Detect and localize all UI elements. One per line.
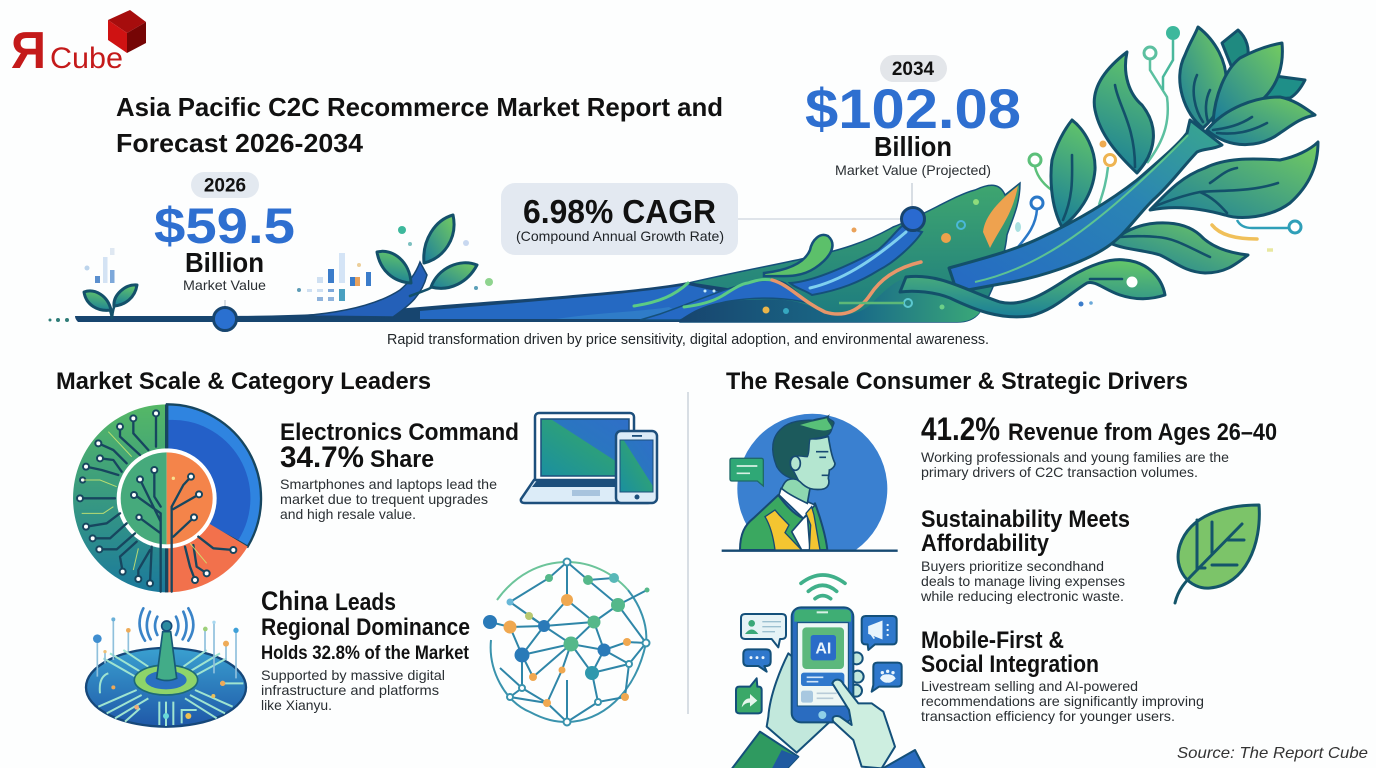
description (921, 449, 1229, 480)
right cuff (882, 750, 925, 768)
source note: Source: The Report Cube (1177, 745, 1368, 762)
tie (806, 507, 820, 550)
bubble lines (737, 466, 757, 473)
timeline base (75, 282, 740, 322)
unit: Billion (874, 131, 952, 162)
description (261, 667, 445, 713)
posts (97, 620, 236, 678)
leaf: upper right flower (1213, 43, 1282, 122)
description: Smartphones and laptops lead the (280, 476, 497, 492)
text: sustainability: Sustainability Meets (921, 506, 1130, 533)
vine node (1126, 276, 1138, 288)
dark lower body (680, 280, 980, 322)
leaf: lower right (1110, 223, 1248, 273)
text: revenue (921, 411, 1277, 480)
text: sustainability (920, 506, 1130, 604)
unit: Billion (185, 247, 264, 278)
floating dots (398, 226, 493, 290)
post tips (93, 617, 239, 653)
leaf: lower flower (1207, 97, 1315, 145)
upper blue stream (790, 226, 922, 295)
leaf: center flower (1180, 27, 1226, 128)
facial features (816, 452, 828, 475)
icon: mobile phone with AI (732, 575, 925, 768)
orange wave (772, 262, 921, 314)
vine leaf (900, 260, 1165, 317)
shirt (779, 488, 815, 550)
icon: leaf (1175, 505, 1259, 603)
icon: network globe (483, 558, 650, 726)
ring nodes (507, 558, 650, 726)
description: Supported by massive digital (261, 667, 445, 683)
lapel (765, 510, 802, 550)
heading: right section: The Resale Consumer & Strategic Drivers (726, 368, 1188, 395)
AI chip (811, 635, 836, 660)
description: transaction efficiency for younger users. (921, 708, 1175, 724)
value: $102.08 (805, 77, 1021, 140)
bubble: chat (743, 649, 771, 672)
jacket (740, 495, 827, 550)
node: 2034 (902, 183, 924, 230)
share figure: 34.7% (280, 441, 364, 474)
heading: Regional Dominance (261, 614, 470, 641)
small plant (300, 215, 477, 317)
year pill (880, 55, 947, 82)
face (792, 437, 835, 490)
ear (790, 456, 800, 470)
text: revenue: Revenue from Ages 26–40 (1008, 419, 1277, 446)
text: electronics (280, 419, 519, 522)
caption: Market Value (Projected) (835, 162, 991, 178)
heading: left section: Market Scale & Category Leaders (56, 368, 431, 395)
body accents (704, 199, 979, 314)
ground line (722, 547, 898, 554)
left cuff (732, 732, 798, 768)
text: sustainability: Affordability (921, 530, 1050, 557)
text: electronics: Electronics Command (280, 419, 519, 446)
callout: CAGR (501, 183, 900, 255)
trunk (949, 120, 1222, 292)
description: infrastructure and platforms (261, 682, 439, 698)
signal waves (140, 608, 193, 641)
icon: red cube (108, 10, 146, 53)
leaf: upper stalk (1094, 52, 1153, 173)
chart: circuit donut (73, 404, 261, 592)
icon: antenna platform (86, 608, 246, 727)
disk traces (98, 650, 243, 726)
text: mobile: Social Integration (921, 651, 1099, 678)
listing card (801, 673, 844, 703)
leaf: small stalk (1051, 120, 1095, 227)
speaker (817, 611, 828, 613)
callout: CAGR: (Compound Annual Growth Rate) (516, 228, 724, 244)
pointing hand (832, 680, 895, 768)
right fingers (850, 652, 864, 697)
hair (773, 416, 834, 480)
green stripe (634, 279, 772, 307)
year pill: 2026 (204, 176, 246, 196)
AI tile (802, 627, 844, 669)
description: and high resale value. (280, 506, 416, 522)
share figure: Share (370, 446, 434, 473)
center ring inner (145, 671, 187, 689)
year pill: 2034 (892, 59, 935, 80)
mini bars right (297, 253, 371, 301)
hair highlight (800, 418, 832, 430)
logo text (11, 22, 123, 80)
home dot (818, 711, 826, 719)
blue segment inner (167, 420, 250, 540)
description: market due to trequent upgrades (280, 491, 488, 507)
description: while reducing electronic waste. (920, 588, 1124, 604)
tower head (162, 621, 172, 631)
leaf: right flower back (1262, 76, 1305, 100)
phone body (792, 607, 853, 722)
lower light band (556, 307, 690, 319)
trunk highlight (975, 135, 1188, 282)
description (920, 558, 1125, 604)
logo text: Cube (50, 42, 123, 75)
text: mobile (921, 627, 1204, 724)
heading: Leads (335, 589, 396, 616)
description: Working professionals and young families are the (921, 449, 1229, 465)
accent dots (111, 681, 225, 719)
small leaf on body (764, 235, 832, 276)
year pill (191, 172, 259, 198)
title (116, 92, 723, 158)
blue nodes (483, 573, 619, 680)
blue circle (737, 414, 887, 550)
phone top band (794, 609, 851, 622)
title: Asia Pacific C2C Recommerce Market Report and (116, 92, 723, 122)
center line (162, 404, 172, 592)
circuit traces (80, 413, 233, 592)
description (280, 476, 497, 522)
circuit tendrils (1015, 26, 1301, 250)
logo text: Я (11, 22, 46, 80)
node: 2026 (214, 300, 236, 330)
speech bubble (730, 458, 763, 486)
tower (157, 632, 177, 680)
center left (121, 452, 167, 544)
neck (782, 478, 810, 503)
share figure (280, 441, 434, 474)
pale traces (82, 432, 207, 570)
globe arcs (491, 562, 646, 722)
cuff shadow (772, 750, 798, 768)
text: mobile: Mobile-First & (921, 627, 1064, 654)
bubble: share (736, 678, 762, 713)
phone screen (797, 623, 848, 706)
heading: China (261, 586, 329, 616)
text: revenue: 41.2% (921, 411, 1000, 447)
description: Livestream selling and AI-powered (921, 678, 1138, 694)
callout: CAGR: 6.98% CAGR (523, 193, 716, 230)
left hand (767, 653, 832, 753)
icon: laptop and phone (521, 413, 657, 503)
icon: professional (722, 414, 898, 551)
description: primary drivers of C2C transaction volumes. (921, 464, 1198, 480)
center ring (134, 665, 198, 695)
dots before timeline (48, 318, 69, 322)
bubble: contact (741, 614, 786, 647)
orange segment (167, 498, 248, 592)
stat: 2026 (154, 172, 295, 293)
title: Forecast 2026-2034 (116, 128, 364, 158)
circuit nodes (77, 410, 236, 586)
bubble: people (872, 663, 902, 692)
sprout (84, 285, 137, 318)
green hill (680, 183, 1020, 322)
small dots under vine (1078, 301, 1093, 306)
blue lobe (640, 280, 808, 320)
leaf veins (1063, 75, 1278, 279)
description (921, 678, 1204, 724)
left half (73, 404, 167, 592)
center right (167, 452, 213, 544)
description: recommendations are significantly improving (921, 693, 1204, 709)
orange nodes (504, 594, 631, 707)
green nodes (545, 574, 650, 652)
AI chip: AI (815, 641, 831, 658)
leaf: back flower (1222, 30, 1248, 68)
bubble: megaphone (862, 616, 897, 650)
leaf: large right (1150, 142, 1318, 217)
heading (261, 586, 470, 641)
light stream highlight (810, 232, 906, 288)
description: Buyers prioritize secondhand (921, 558, 1104, 574)
logo: RCube (11, 10, 146, 80)
text: China (261, 586, 470, 713)
description: like Xianyu. (261, 697, 332, 713)
disk (86, 648, 246, 727)
links (490, 562, 647, 722)
description: deals to manage living expenses (921, 573, 1125, 589)
growth illustration (48, 26, 1318, 330)
value: $59.5 (154, 198, 295, 254)
orange flame leaf (983, 186, 1018, 248)
blue segment outer (167, 404, 261, 547)
center ring (117, 448, 217, 548)
tagline: Rapid transformation driven by price sensitivity, digital adoption, and environmental awareness. (387, 332, 989, 348)
stat: 2034 (805, 55, 1021, 178)
blue band (420, 285, 725, 319)
subheading: Holds 32.8% of the Market (261, 643, 470, 664)
caption: Market Value (183, 277, 266, 293)
wifi signal (801, 575, 845, 599)
mini bars left (84, 248, 114, 283)
